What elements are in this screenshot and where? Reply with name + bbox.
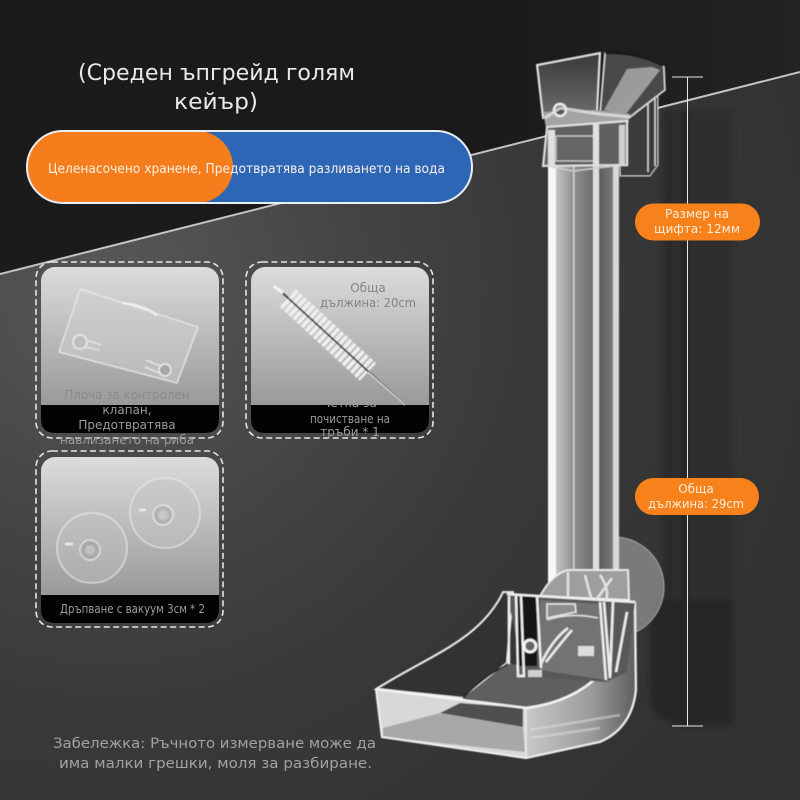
panel: suction cups xyxy=(36,451,223,627)
label: total length 20cm xyxy=(320,281,416,310)
suction cup xyxy=(564,537,664,637)
tray xyxy=(376,592,636,758)
badge: pin size: Размер на xyxy=(665,207,729,221)
badge: total length: дължина: 29cm xyxy=(648,497,744,511)
title: (Среден ъпгрейд голям xyxy=(78,61,355,86)
neck box xyxy=(543,121,627,171)
label: plate: клапан, xyxy=(102,403,152,417)
dimension line xyxy=(672,77,703,726)
funnel hopper xyxy=(537,53,665,128)
valve mechanism xyxy=(507,570,635,682)
label: plate: Плоча за контролен xyxy=(64,388,190,402)
feature pill xyxy=(20,131,472,203)
note: има малки грешки, моля за разбиране. xyxy=(59,756,372,772)
label: suction cups: Дръпване с вакуум 3см * 2 xyxy=(60,602,205,616)
badge: pin size xyxy=(635,204,760,240)
panel: cleaning brush xyxy=(246,262,433,439)
icon: plate xyxy=(59,289,198,383)
icon: suction cup right xyxy=(130,478,200,548)
label: brush: четка за xyxy=(323,396,377,410)
note: Забележка: Ръчното измерване може да xyxy=(53,736,376,752)
label: plate xyxy=(60,388,194,447)
title xyxy=(78,61,355,115)
label: total length 20cm: дължина: 20cm xyxy=(320,296,416,310)
badge: total length: Обща xyxy=(678,482,714,496)
feeder product xyxy=(376,53,665,758)
title: кейър) xyxy=(174,90,258,115)
mounting clip xyxy=(620,95,658,176)
label: brush xyxy=(310,396,390,439)
label: brush: тръби * 1 xyxy=(320,425,380,439)
tube xyxy=(548,160,619,592)
label: plate: Предотвратява xyxy=(78,418,176,432)
badge: pin size: щифта: 12мм xyxy=(654,222,740,236)
note xyxy=(53,736,376,772)
label: brush: почистване на xyxy=(310,412,390,426)
label: plate: навлизането на риба xyxy=(60,433,194,447)
icon: suction cup left xyxy=(57,513,127,583)
feature pill: Целенасочено хранене, Предотвратява разливането на вода xyxy=(48,162,445,177)
badge: total length xyxy=(635,478,759,515)
panel: valve control plate xyxy=(36,262,223,447)
label: total length 20cm: Обща xyxy=(350,281,386,295)
icon: brush xyxy=(275,287,405,405)
